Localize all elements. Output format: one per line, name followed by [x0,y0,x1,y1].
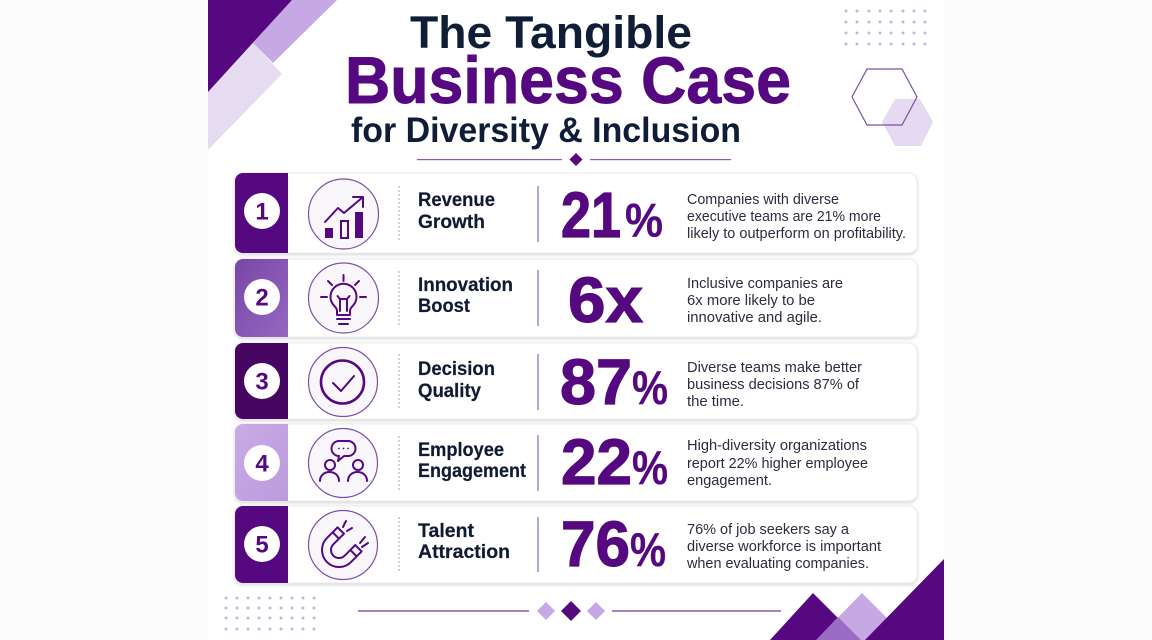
row 4 card [235,424,917,501]
row 3: decision quality [235,343,917,419]
row 5 label: Talent [418,520,474,542]
hexagon decoration [852,69,933,146]
row 4 description: engagement. [687,473,772,489]
row 4 label: Engagement [418,460,526,482]
title: Business Case [345,43,791,117]
row 2 label: Innovation [418,274,513,296]
row 4 number badge: 4 [255,450,269,478]
dot grid top right [844,10,926,46]
row 5 number badge: 5 [255,532,269,558]
icon: check mark [308,348,378,416]
icon: people talking [308,428,378,498]
row 5 stat [561,508,666,580]
row 1 description: executive teams are 21% more [687,209,881,225]
row 2 number badge: 2 [255,284,269,312]
title: for Diversity & Inclusion [351,111,741,150]
row 3 description: Diverse teams make better [687,360,862,376]
row 1 stat: 21 [561,179,621,251]
row 4 number badge [235,424,288,501]
row 3 card [235,343,917,419]
row 5 number badge [235,506,288,583]
row 4 label: Employee [418,439,504,461]
row 1 stat: % [625,194,663,246]
row 3 number badge: 3 [255,368,269,396]
row 5 card [235,506,917,583]
bottom divider with diamonds [358,601,781,621]
row 2 stat: 6x [568,264,643,336]
top-left corner decoration [208,0,337,150]
bottom-right corner decoration [770,559,944,640]
row 2 description: 6x more likely to be [687,293,815,309]
row 3 label: Quality [418,380,481,402]
row 5 description: when evaluating companies. [686,556,869,572]
title: The Tangible [410,7,692,58]
title divider [417,153,731,166]
row 2 description: innovative and agile. [687,310,822,326]
icon: growth chart [308,179,378,249]
row 3 number badge [235,343,288,419]
row 3 description: business decisions 87% of [687,377,860,393]
row 5 description: diverse workforce is important [687,539,881,555]
row 1 card [235,173,917,253]
row 4 stat: % [632,441,668,494]
row 1 label: Revenue [418,189,495,211]
row 2: innovation boost [235,259,917,337]
row 1 number badge: 1 [255,198,269,226]
title [345,7,791,150]
row 3 stat: % [632,361,668,414]
row 3 stat: 87 [560,346,632,418]
row 1 number badge [235,173,288,253]
row 1 stat [561,179,663,251]
row 2 description: Inclusive companies are [687,276,843,292]
row 5 stat: % [630,523,666,576]
row 1 description: likely to outperform on profitability. [687,226,906,242]
row 1 label: Growth [418,211,485,233]
row 4 description: High-diversity organizations [687,438,867,454]
row 2 number badge [235,259,288,337]
row 2 label: Boost [418,295,470,317]
row 4 stat: 22 [561,426,632,498]
row 3 label: Decision [418,358,495,380]
row 5: talent attraction [235,506,917,583]
row 2 card [235,259,917,337]
row 4 description: report 22% higher employee [687,456,868,472]
row 4: employee engagement [235,424,917,501]
icon: light bulb [308,263,378,333]
dot grid bottom left [224,596,316,630]
row 1 description: Companies with diverse [687,192,839,208]
row 3 stat [560,346,668,418]
icon: magnet [308,510,378,580]
row 5 description: 76% of job seekers say a [687,522,850,538]
row 4 stat [561,426,668,498]
row 1: revenue growth [235,173,917,253]
central page panel [208,0,944,640]
row 5 stat: 76 [561,508,630,580]
row 3 description: the time. [687,394,744,410]
row 5 label: Attraction [418,541,510,563]
